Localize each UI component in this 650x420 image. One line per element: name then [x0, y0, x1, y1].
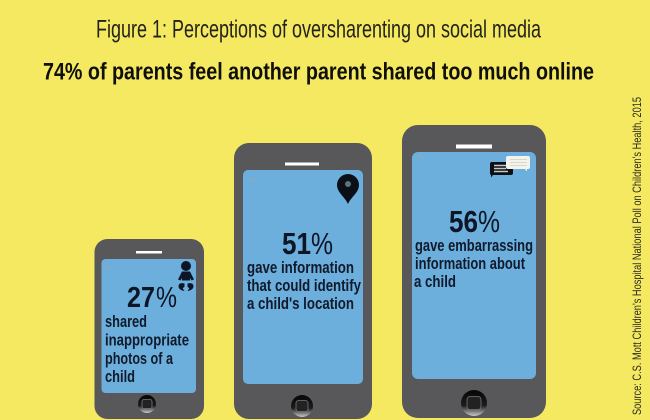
speaker — [456, 144, 492, 148]
signal icon — [105, 265, 110, 269]
signal icon — [417, 155, 422, 159]
description: gave embarrassing — [415, 236, 533, 255]
description: that could identify — [247, 276, 361, 295]
icon: chat bubbles — [490, 156, 530, 178]
description: photos of a — [105, 349, 173, 368]
description: child — [105, 367, 135, 386]
home button — [291, 395, 313, 417]
description: a child — [414, 272, 456, 291]
home button — [461, 390, 487, 416]
description: shared — [105, 312, 147, 331]
statistic 27% — [127, 282, 177, 314]
description: a child's location — [247, 294, 354, 313]
description — [414, 236, 533, 291]
icon: baby — [178, 261, 194, 291]
description: gave information — [247, 258, 354, 277]
screen — [412, 152, 536, 379]
statistic 51%: 51 — [282, 226, 311, 261]
statistic 56%: 56 — [449, 204, 478, 239]
source note: Source: C.S. Mott Children's Hospital National Poll on Children's Health, 2015 — [630, 97, 644, 415]
statistic 51% — [282, 226, 333, 261]
screen — [102, 259, 196, 393]
icon: location pin — [337, 174, 359, 204]
description — [105, 312, 189, 386]
statistic 27%: % — [156, 282, 177, 314]
phone body — [402, 125, 546, 418]
description — [247, 258, 361, 313]
description: information about — [415, 254, 525, 273]
signal icon — [250, 178, 255, 182]
phone: 56% embarrassing — [402, 125, 546, 418]
home button — [138, 395, 156, 413]
phone body — [234, 143, 372, 419]
statistic 27%: 27 — [127, 282, 155, 314]
description: inappropriate — [105, 330, 189, 350]
speaker — [136, 251, 162, 254]
phone: 51% location — [234, 143, 372, 419]
speaker — [285, 162, 319, 166]
screen — [243, 170, 363, 384]
statistic 56%: % — [478, 204, 500, 239]
phone body — [94, 239, 204, 419]
statistic 51%: % — [311, 226, 333, 261]
phone: 27% shared inappropriate photos — [94, 239, 204, 419]
statistic 56% — [449, 204, 500, 239]
